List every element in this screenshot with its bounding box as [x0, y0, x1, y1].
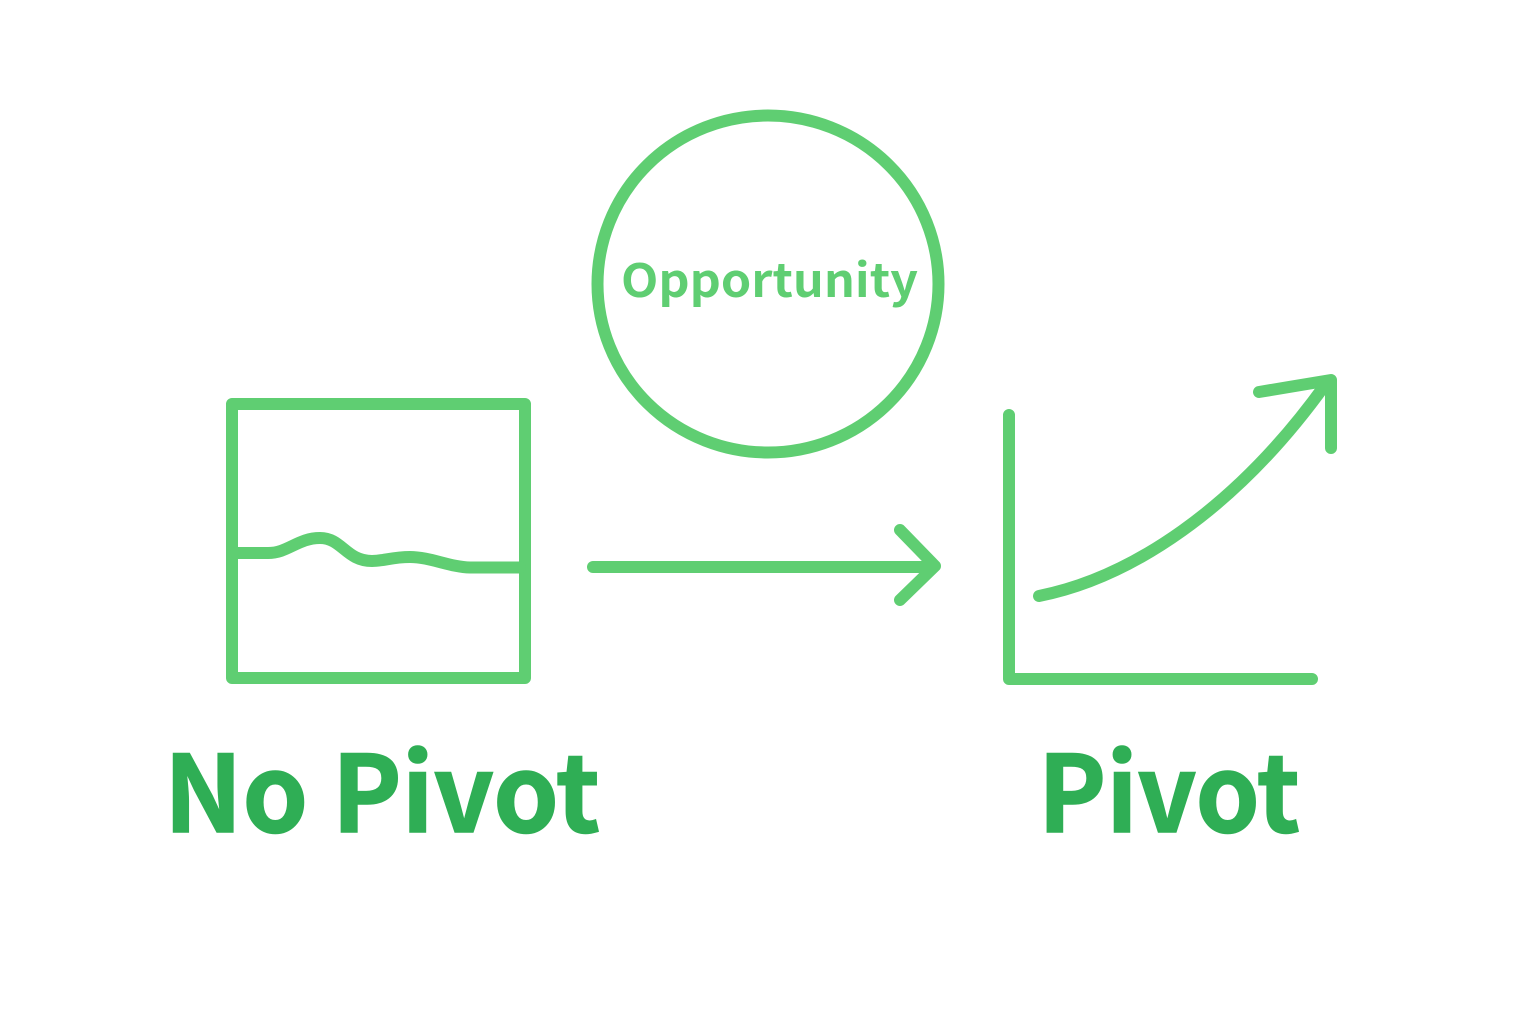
- icon: no pivot flat chart: [232, 404, 525, 678]
- icon: pivot growth chart: [1009, 380, 1331, 679]
- opportunity label: Opportunity: [621, 245, 918, 311]
- label: pivot: Pivot: [1038, 709, 1300, 863]
- arrow: no pivot to pivot: [593, 530, 935, 600]
- opportunity circle: [598, 116, 938, 452]
- label: no pivot: No Pivot: [164, 709, 600, 863]
